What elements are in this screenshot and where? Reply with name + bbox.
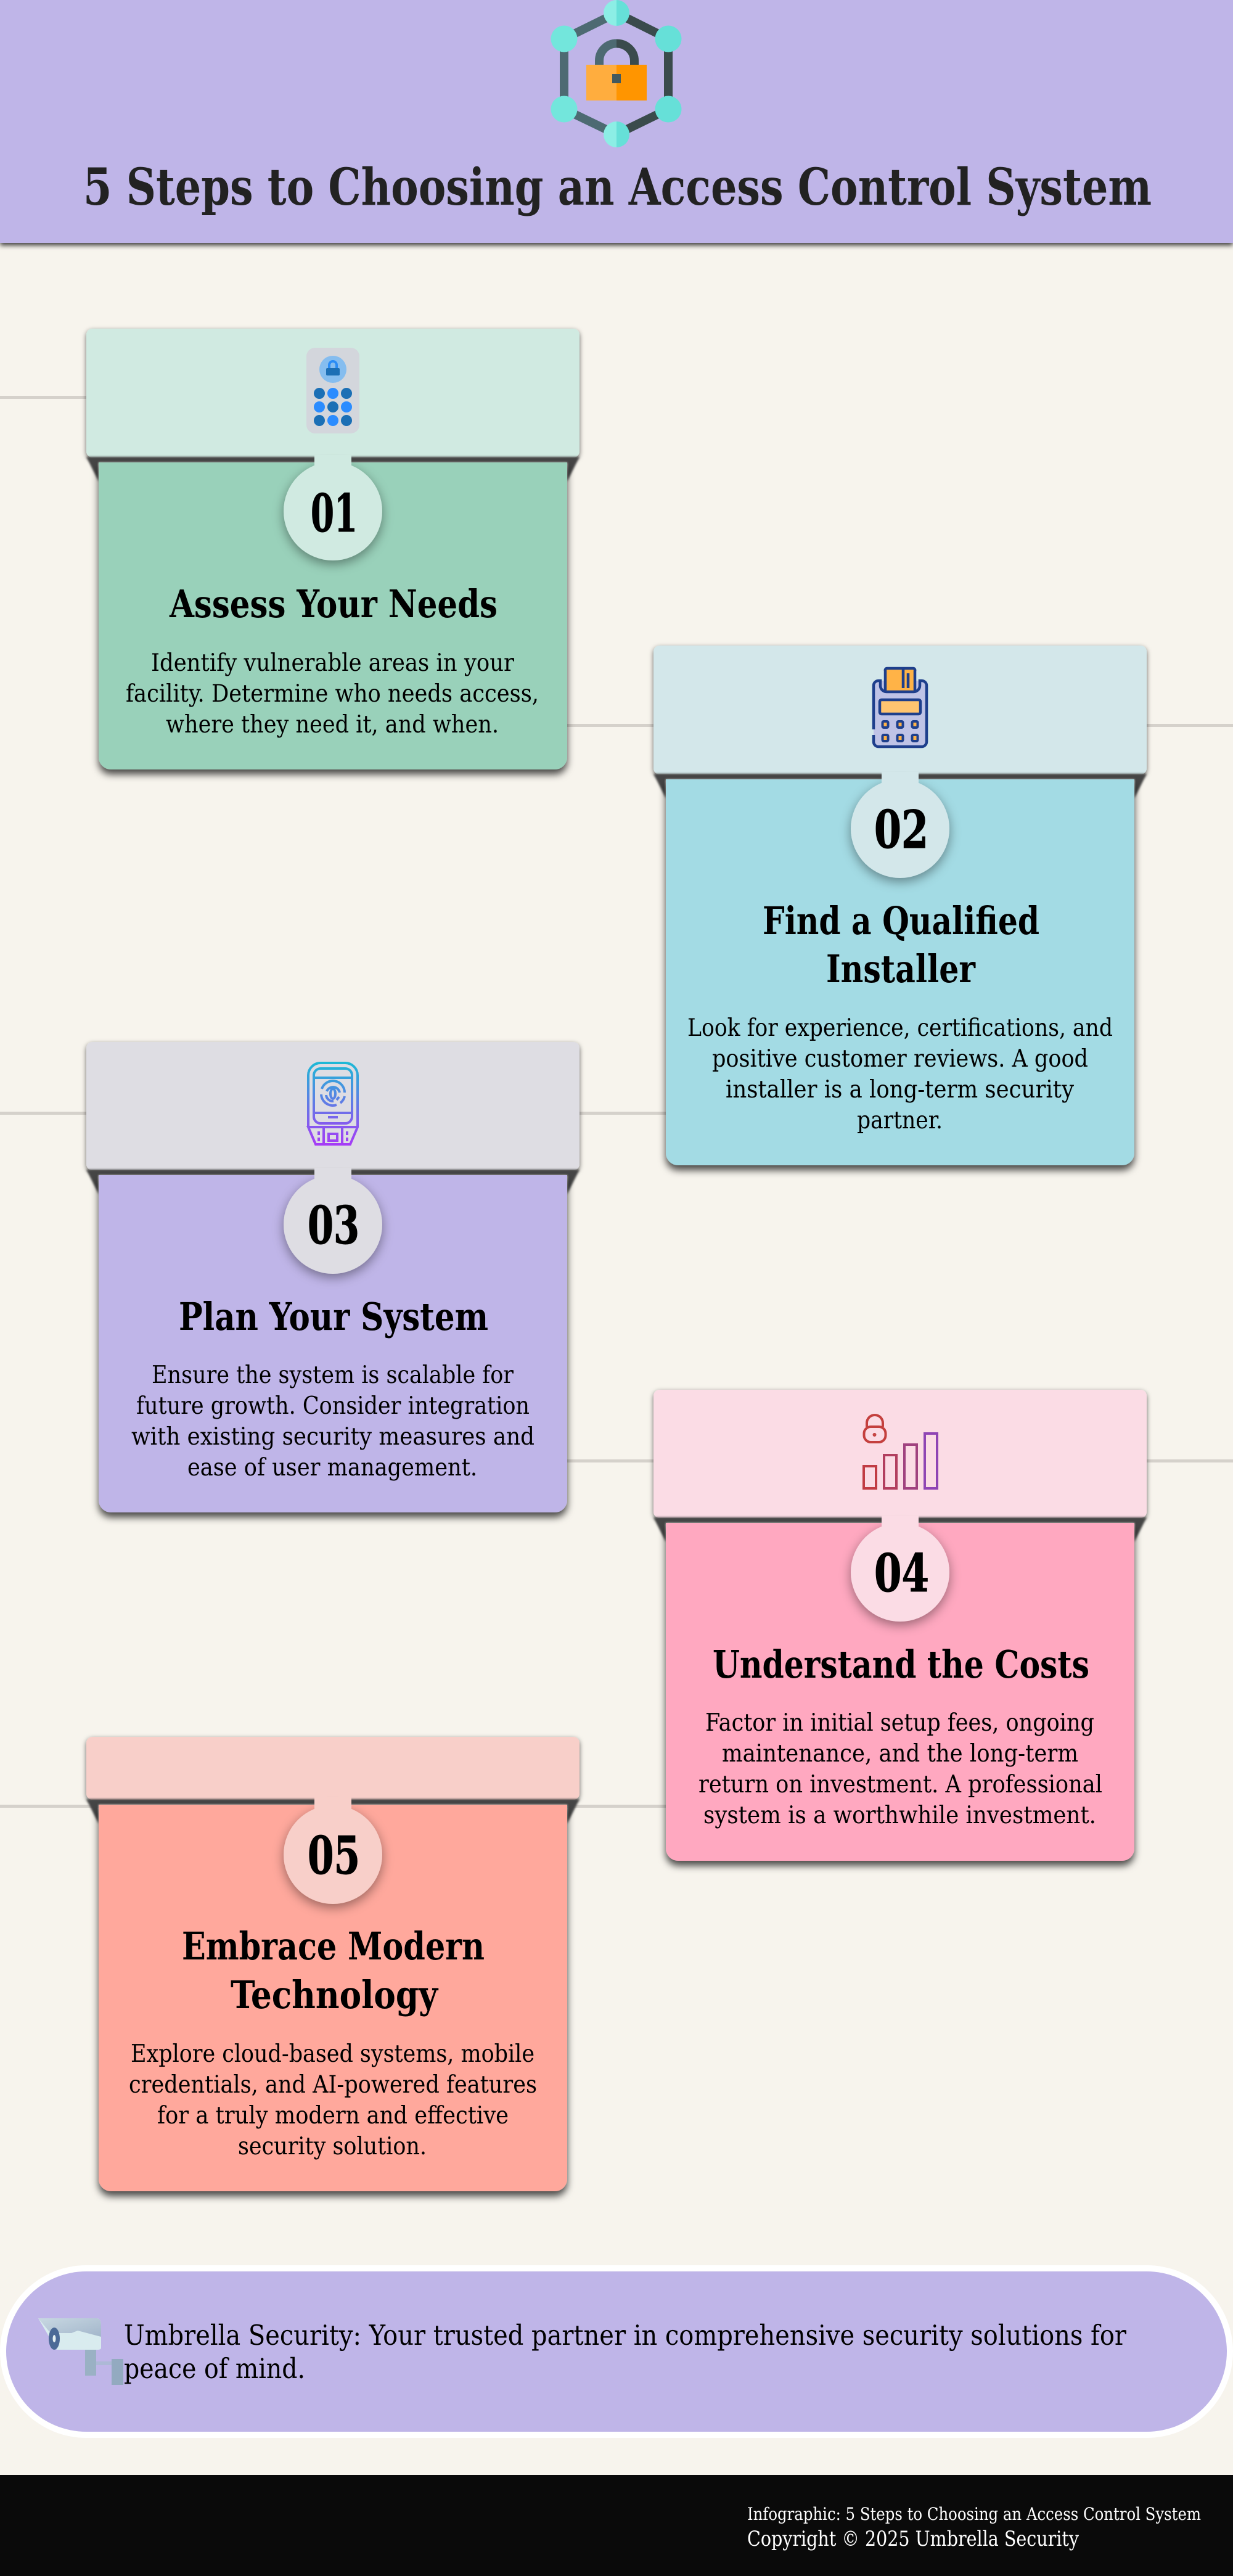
card body — [99, 1175, 567, 1512]
number badge: 02 — [874, 799, 928, 860]
footer text: Copyright © 2025 Umbrella Security — [747, 2527, 1079, 2551]
step description: partner. — [857, 1107, 943, 1134]
number badge — [851, 1516, 949, 1622]
number badge — [284, 455, 382, 560]
step description — [126, 649, 539, 739]
step heading — [763, 898, 1039, 991]
step description: Explore cloud-based systems, mobile — [131, 2040, 535, 2068]
step heading: Embrace Modern — [182, 1924, 485, 1969]
step description: Identify vulnerable areas in your — [151, 649, 514, 677]
card top panel — [86, 1042, 580, 1170]
title: 5 Steps to Choosing an Access Control System — [83, 158, 1152, 217]
callout text: Umbrella Security: Your trusted partner in comprehensive security solutions for — [124, 2319, 1127, 2352]
step heading — [182, 1924, 485, 2017]
step description: Look for experience, certifications, and — [687, 1014, 1113, 1042]
step description: where they need it, and when. — [166, 711, 499, 739]
card top panel — [86, 1737, 580, 1800]
step description: with existing security measures and — [131, 1423, 535, 1451]
step description — [687, 1014, 1113, 1134]
number badge — [851, 772, 949, 878]
card top panel — [86, 329, 580, 457]
step description — [698, 1709, 1102, 1829]
panel: step 05 — [86, 1737, 580, 2191]
panel: step 04 — [653, 1390, 1147, 1861]
icon: padlock in hexagon network — [551, 0, 682, 147]
icon: fingerprint terminal — [308, 1063, 358, 1144]
step heading: Understand the Costs — [713, 1642, 1089, 1687]
card body — [99, 1805, 567, 2191]
step description: ease of user management. — [187, 1454, 477, 1482]
step description: security solution. — [238, 2133, 427, 2160]
number badge: 03 — [308, 1195, 359, 1256]
step description: Factor in initial setup fees, ongoing — [705, 1709, 1094, 1737]
step description: Ensure the system is scalable for — [152, 1361, 514, 1389]
panel: step 03 — [86, 1042, 580, 1512]
callout text: peace of mind. — [124, 2352, 305, 2385]
step description: facility. Determine who needs access, — [126, 680, 539, 708]
step heading: Plan Your System — [179, 1294, 488, 1339]
step heading: Technology — [231, 1972, 438, 2017]
card body — [99, 462, 567, 769]
step description: positive customer reviews. A good — [712, 1045, 1088, 1073]
number badge: 04 — [874, 1543, 929, 1604]
step description: return on investment. A professional — [698, 1771, 1102, 1799]
panel: step 02 — [653, 646, 1147, 1165]
footer bar — [0, 2475, 1233, 2576]
step heading: Assess Your Needs — [169, 581, 498, 626]
step description: installer is a long-term security — [726, 1076, 1074, 1104]
step description: maintenance, and the long-term — [722, 1740, 1078, 1768]
number badge — [284, 1168, 382, 1274]
step description — [129, 2040, 537, 2160]
footer text: Infographic: 5 Steps to Choosing an Access Control System — [747, 2504, 1201, 2524]
step description: for a truly modern and effective — [157, 2102, 509, 2130]
number badge: 01 — [311, 483, 358, 544]
card body — [666, 1523, 1134, 1861]
step heading: Find a Qualified — [763, 898, 1039, 943]
step heading: Installer — [826, 946, 976, 991]
connector lines — [0, 396, 1233, 1808]
footer text — [747, 2504, 1201, 2551]
step description — [131, 1361, 535, 1482]
step description: credentials, and AI-powered features — [129, 2071, 537, 2099]
closing callout pill — [0, 2265, 1233, 2438]
card top panel — [653, 1390, 1147, 1518]
icon: card reader — [874, 668, 927, 747]
icon: lock and rising bars — [864, 1415, 937, 1488]
step description: system is a worthwhile investment. — [703, 1802, 1096, 1829]
header banner — [0, 0, 1233, 243]
icon: security camera — [38, 2318, 123, 2385]
panel: step 01 — [86, 329, 580, 769]
step description: future growth. Consider integration — [136, 1392, 530, 1420]
number badge: 05 — [308, 1825, 360, 1886]
card body — [666, 779, 1134, 1165]
card top panel — [653, 646, 1147, 774]
number badge — [284, 1797, 382, 1904]
callout text — [124, 2319, 1127, 2385]
icon: keypad lock — [306, 348, 359, 433]
